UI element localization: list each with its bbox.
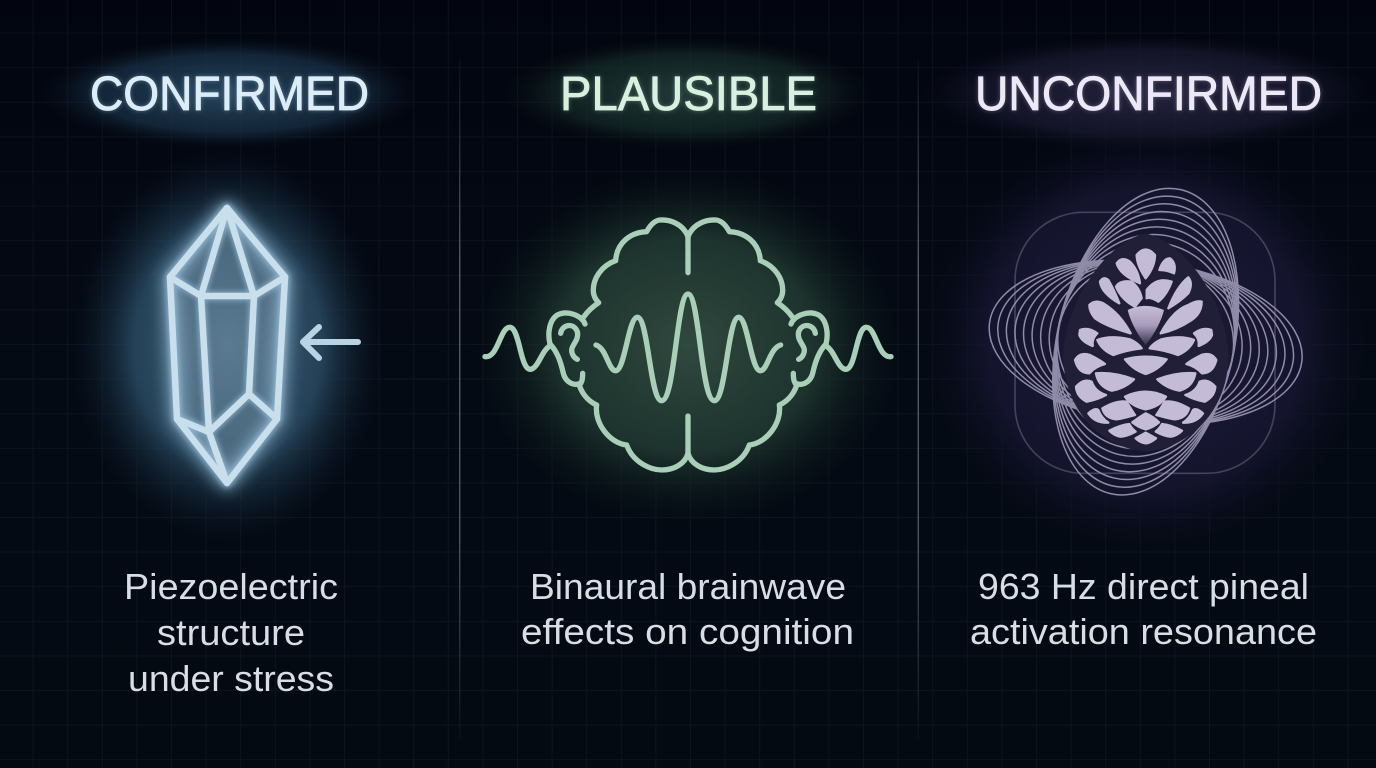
heading: confirmed	[40, 37, 420, 149]
text: unconfirmed description	[970, 566, 1317, 652]
cone scales, right half	[1150, 329, 1216, 437]
heading: plausible	[503, 37, 873, 149]
icon: pine cone with resonance rings	[921, 125, 1371, 555]
text: unconfirmed description: activation resonance	[970, 611, 1317, 652]
icon: crystal under stress with arrow	[70, 147, 386, 543]
heading: confirmed: CONFIRMED	[90, 68, 369, 121]
heading: plausible: PLAUSIBLE	[560, 68, 817, 121]
text: confirmed description: structure	[157, 612, 305, 653]
text: confirmed description: under stress	[128, 658, 334, 699]
text: confirmed description: Piezoelectric	[124, 566, 338, 607]
text: plausible description: Binaural brainwave	[530, 566, 846, 607]
panel: unconfirmed	[918, 33, 1376, 652]
right half of brain and ear	[688, 220, 891, 470]
text: plausible description: effects on cognition	[521, 611, 854, 652]
panel: plausible	[473, 37, 903, 652]
heading: unconfirmed	[918, 33, 1376, 153]
text: unconfirmed description: 963 Hz direct pineal	[978, 566, 1309, 607]
left half of brain and ear	[485, 220, 688, 470]
icon: brain with ears and brainwave	[473, 165, 903, 525]
panel: confirmed	[40, 37, 420, 699]
rounded outline rings	[1015, 212, 1275, 473]
heading: unconfirmed: UNCONFIRMED	[975, 68, 1322, 121]
text: confirmed description	[124, 566, 338, 699]
heading: unconfirmed: UNCONFIRMED	[975, 68, 1322, 121]
heading: plausible: PLAUSIBLE	[560, 68, 817, 121]
center brainwave	[596, 294, 781, 401]
resonance rings: top and bottom lobes	[1025, 170, 1267, 514]
dark cone silhouette	[1063, 233, 1228, 452]
heading: confirmed: CONFIRMED	[90, 68, 369, 121]
text: plausible description	[521, 566, 854, 652]
arrow: compression force	[303, 327, 358, 358]
cone scales, left half	[1075, 259, 1142, 437]
resonance rings: left and right lobes	[980, 243, 1312, 442]
cone scales, center column	[1125, 249, 1202, 443]
